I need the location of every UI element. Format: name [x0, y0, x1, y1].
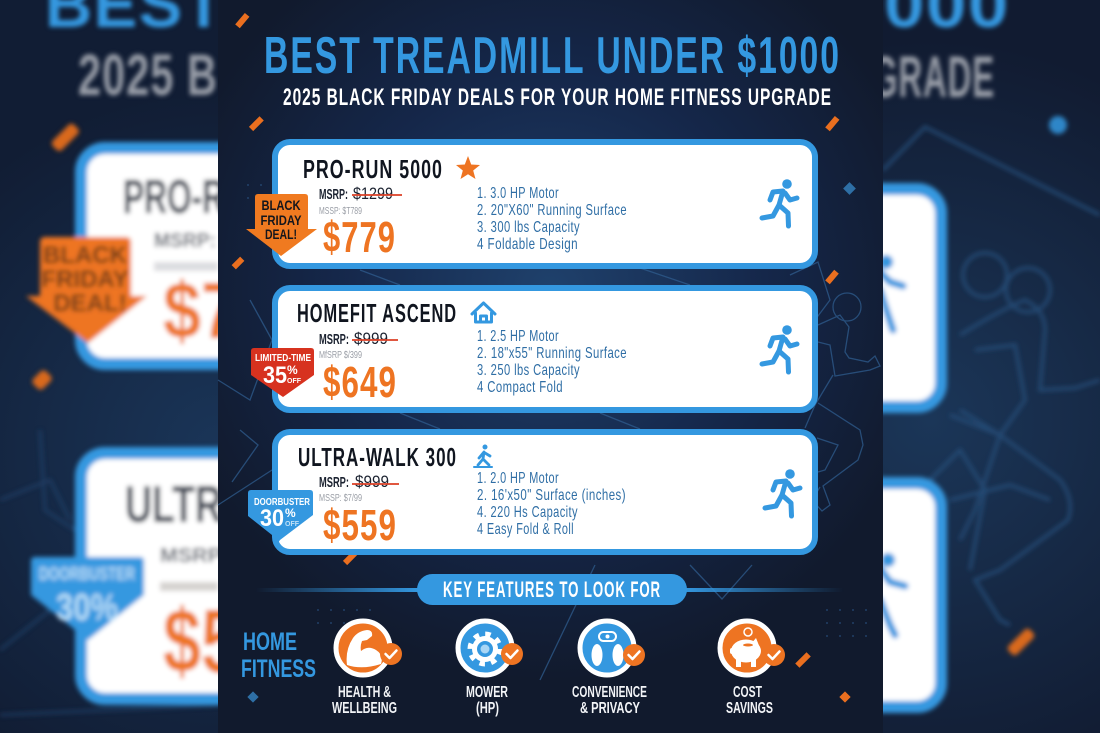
panel: blurred left backdrop: PRO-R	[123, 171, 225, 224]
feature label	[572, 684, 647, 717]
panel: blurred left backdrop: MSRP:	[154, 230, 216, 252]
specification list: 4 Easy Fold & Roll	[477, 521, 574, 538]
badge: limited-time 35% off	[251, 348, 314, 397]
feature label: (HP)	[476, 700, 499, 717]
feature label: WELLBEING	[332, 700, 397, 717]
decorative dot grid	[247, 184, 867, 637]
badge: doorbuster 30% off: %	[285, 506, 296, 520]
panel: blurred left backdrop: FRIDAY	[41, 266, 129, 293]
icon: scale and footprints	[592, 632, 624, 666]
feature label: COST	[733, 684, 762, 701]
icon: check badge	[623, 644, 645, 666]
panel: blurred right backdrop	[883, 0, 1100, 733]
badge: limited-time 35% off: OFF	[287, 378, 302, 385]
icon: walker	[474, 444, 492, 467]
panel: blurred left backdrop: 2025 B	[78, 43, 218, 108]
panel: Ultra-Walk 300 card	[275, 432, 815, 552]
specification list	[477, 470, 626, 538]
badge: Black Friday deal arrow: FRIDAY	[260, 212, 302, 228]
home fitness label: HOME	[243, 628, 297, 656]
sale price: $649	[323, 358, 397, 407]
specification list: 3. 250 lbs Capacity	[477, 362, 580, 379]
decorative runner line art	[218, 262, 880, 680]
specification list: 1. 3.0 HP Motor	[477, 185, 559, 202]
sale price: $779	[323, 213, 396, 262]
icon: check badge	[501, 643, 523, 665]
list price: $999	[354, 329, 388, 348]
specification list: 2. 16'x50" Surface (inches)	[477, 487, 626, 504]
panel: blurred left backdrop	[0, 0, 218, 733]
secondary price: MSSP: $7/99	[319, 493, 362, 504]
specification list	[477, 328, 627, 396]
badge: limited-time 35% off: %	[287, 363, 298, 377]
panel: blurred left backdrop: 30%	[56, 587, 118, 629]
list price: MSRP:	[319, 186, 348, 203]
badge: Black Friday deal arrow: DEAL!	[265, 226, 297, 242]
badge: limited-time 35% off: LIMITED-TIME	[255, 352, 311, 364]
sale price: $559	[323, 501, 397, 550]
feature label: CONVENIENCE	[572, 684, 647, 701]
feature: health and wellbeing	[332, 621, 402, 717]
feature label	[466, 684, 508, 717]
badge: Black Friday deal arrow	[246, 194, 317, 256]
badge: doorbuster 30% off	[248, 490, 313, 546]
specification list: 4 Foldable Design	[477, 236, 578, 253]
specification list: 4. 220 Hs Capacity	[477, 504, 578, 521]
panel: blurred left backdrop: DOORBUSTER	[39, 564, 135, 584]
specification list	[477, 185, 627, 253]
secondary price: MSSP: $T789	[319, 206, 362, 217]
panel: HomeFit Ascend card	[275, 288, 815, 410]
badge: doorbuster 30% off: OFF	[285, 521, 300, 528]
icon: flexed arm	[347, 630, 382, 667]
home fitness label: FITNESS	[241, 655, 316, 683]
feature: motor power	[458, 621, 523, 717]
panel: blurred right backdrop: GRADE	[872, 45, 995, 110]
diamond: home fitness accent	[247, 691, 259, 703]
list price	[319, 329, 398, 348]
specification list: 3. 300 lbs Capacity	[477, 219, 580, 236]
list price	[319, 184, 402, 203]
feature label: MOWER	[466, 684, 508, 701]
icon: check badge	[380, 643, 402, 665]
icon: house	[472, 303, 495, 322]
feature label	[332, 684, 397, 717]
secondary price: MfSRP $/399	[319, 350, 362, 361]
badge: doorbuster 30% off: DOORBUSTER	[254, 496, 310, 508]
feature: cost savings	[720, 621, 785, 717]
feature label: SAVINGS	[726, 700, 773, 717]
icon: piggy bank	[730, 628, 761, 667]
panel: blurred left backdrop: DEAL!	[53, 290, 127, 317]
specification list: 2. 18"x55" Running Surface	[477, 345, 627, 362]
feature label	[726, 684, 773, 717]
product name: ULTRA-WALK 300	[298, 442, 457, 472]
panel: blurred left backdrop: BLACK	[43, 242, 128, 269]
icon: check badge	[763, 644, 785, 666]
diamond: blue accent	[843, 182, 856, 195]
icon: runner	[762, 325, 797, 372]
feature: convenience and privacy	[572, 621, 647, 717]
divider line right	[684, 588, 844, 592]
feature label: HEALTH &	[338, 684, 391, 701]
panel: blurred left backdrop: $5	[163, 592, 239, 692]
product name: PRO-RUN 5000	[303, 154, 443, 184]
list price: MSRP:	[319, 331, 349, 348]
list price	[319, 472, 399, 491]
section heading pill: KEY FEATURES TO LOOK FOR	[443, 577, 661, 602]
panel: Pro-Run 5000 card	[275, 142, 815, 266]
badge: doorbuster 30% off: 30	[260, 505, 284, 532]
product name: HOMEFIT ASCEND	[297, 298, 457, 328]
panel: blurred left backdrop: MSRP	[160, 545, 222, 567]
icon: runner	[762, 179, 797, 226]
divider line left	[255, 588, 419, 592]
home fitness label	[241, 628, 316, 683]
icon: star	[456, 156, 480, 179]
decorative orange confetti and diamonds	[232, 13, 851, 703]
list price: MSRP:	[319, 474, 349, 491]
specification list: 1. 2.5 HP Motor	[477, 328, 559, 345]
specification list: 1. 2.0 HP Motor	[477, 470, 559, 487]
specification list: 4 Compact Fold	[477, 379, 563, 396]
badge: Black Friday deal arrow: BLACK	[262, 197, 300, 213]
feature label: & PRIVACY	[580, 700, 640, 717]
icon: runner	[765, 469, 800, 516]
icon: gear	[470, 634, 500, 664]
panel: blurred left backdrop: $7	[163, 266, 239, 355]
specification list: 2. 20"X60" Running Surface	[477, 202, 627, 219]
panel: blurred left backdrop: ULTR	[125, 476, 222, 534]
panel: central poster background	[218, 0, 883, 733]
badge: limited-time 35% off: 35	[263, 362, 287, 389]
list price: $999	[355, 472, 389, 491]
section heading pill	[417, 574, 687, 605]
list price: $1299	[353, 184, 393, 203]
